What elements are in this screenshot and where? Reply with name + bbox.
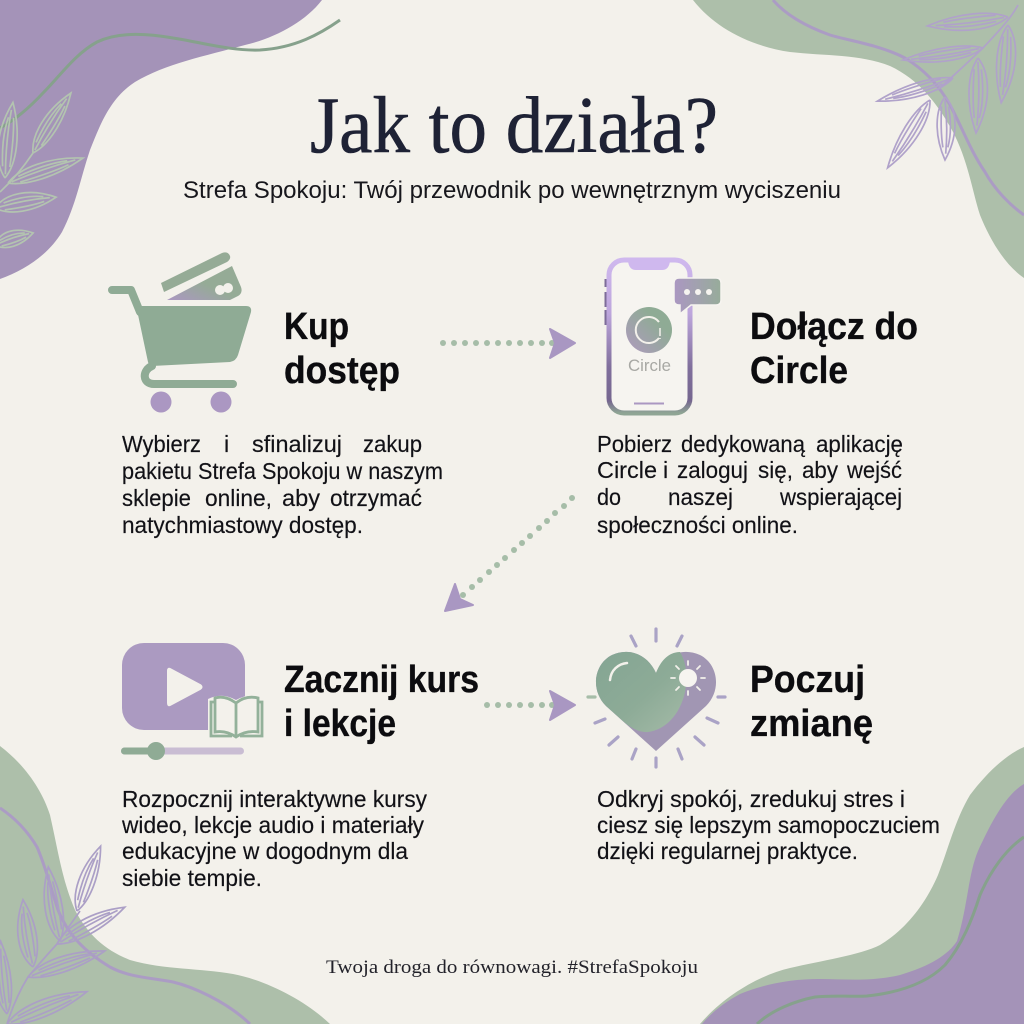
step 1 heading	[284, 306, 400, 392]
corner: top left	[0, 0, 340, 279]
title: Jak to działa?	[310, 82, 718, 170]
step 4 text	[597, 786, 940, 864]
step 1 text	[122, 431, 443, 538]
step 1 icon: shopping cart with card	[112, 252, 251, 412]
step 1 text: Wybierz	[122, 431, 201, 457]
step 1 text: aby	[282, 485, 321, 511]
step 1 text: pakietu Strefa Spokoju w naszym	[122, 458, 443, 484]
step 1 text: natychmiastowy dostęp.	[122, 512, 363, 538]
step 4 text: Odkryj spokój, zredukuj stres i	[597, 786, 905, 812]
step 2 text: się,	[758, 457, 793, 483]
step 2 text	[597, 431, 903, 538]
step 4 icon: heart with sun	[588, 629, 725, 767]
step 2 text: zaloguj	[677, 457, 748, 483]
step 1 text: sklepie	[122, 485, 191, 511]
step 3 text: Rozpocznij interaktywne kursy	[122, 786, 427, 812]
step 2 text: i	[663, 457, 668, 483]
step 2 text: do	[597, 484, 621, 510]
step 1 heading: dostęp	[284, 350, 400, 392]
step 1 text: i	[224, 431, 229, 457]
corner: bottom right	[700, 747, 1024, 1024]
step 4 heading	[750, 659, 873, 745]
step 3 text: wideo, lekcje audio i materiały	[121, 812, 424, 838]
step 1 text: sfinalizuj	[252, 431, 342, 457]
step 3 heading	[284, 659, 479, 745]
step 2 text: dedykowaną	[681, 431, 805, 457]
step 2 text: wejść	[846, 457, 902, 483]
step 2 text: Circle	[597, 457, 657, 483]
step 4 heading: Poczuj	[750, 659, 865, 701]
step 2 text: Pobierz	[597, 431, 672, 457]
step 1 text: zakup	[363, 431, 422, 457]
step 1 heading: Kup	[284, 306, 349, 348]
step 1 text: otrzymać	[330, 485, 422, 511]
step 2 heading: Dołącz do	[750, 306, 918, 348]
step 2 text: społeczności online.	[597, 512, 798, 538]
step 2 text: aby	[802, 457, 838, 483]
arrow: step 1 to step 2	[440, 329, 575, 358]
step 3 heading: i lekcje	[284, 703, 396, 745]
step 4 heading: zmianę	[750, 703, 873, 745]
arrow: step 2 to step 3	[445, 495, 575, 611]
step 3 text	[121, 786, 427, 891]
step 2 text: wspierającej	[779, 484, 902, 510]
step 2 icon: phone with Circle app: Circle	[628, 356, 671, 375]
step 2 heading	[750, 306, 918, 392]
step 3 text: edukacyjne w dogodnym dla	[122, 838, 408, 864]
step 3 text: siebie tempie.	[122, 865, 262, 891]
step 2 text: naszej	[668, 484, 733, 510]
subtitle: Strefa Spokoju: Twój przewodnik po wewnętrznym wyciszeniu	[183, 177, 841, 204]
step 4 text: dzięki regularnej praktyce.	[597, 838, 858, 864]
step 2 heading: Circle	[750, 350, 848, 392]
step 4 text: ciesz się lepszym samopoczuciem	[597, 812, 940, 838]
arrow: step 3 to step 4	[484, 691, 575, 720]
step 3 icon: video player and book	[121, 643, 265, 760]
step 3 heading: Zacznij kurs	[284, 659, 479, 701]
step 2 text: aplikację	[816, 431, 903, 457]
footer: Twoja droga do równowagi. #StrefaSpokoju	[326, 957, 699, 978]
corner: bottom left	[0, 746, 330, 1024]
step 1 text: online,	[205, 485, 272, 511]
step 2 icon: phone with Circle app	[604, 260, 721, 413]
corner: top right	[693, 0, 1024, 278]
